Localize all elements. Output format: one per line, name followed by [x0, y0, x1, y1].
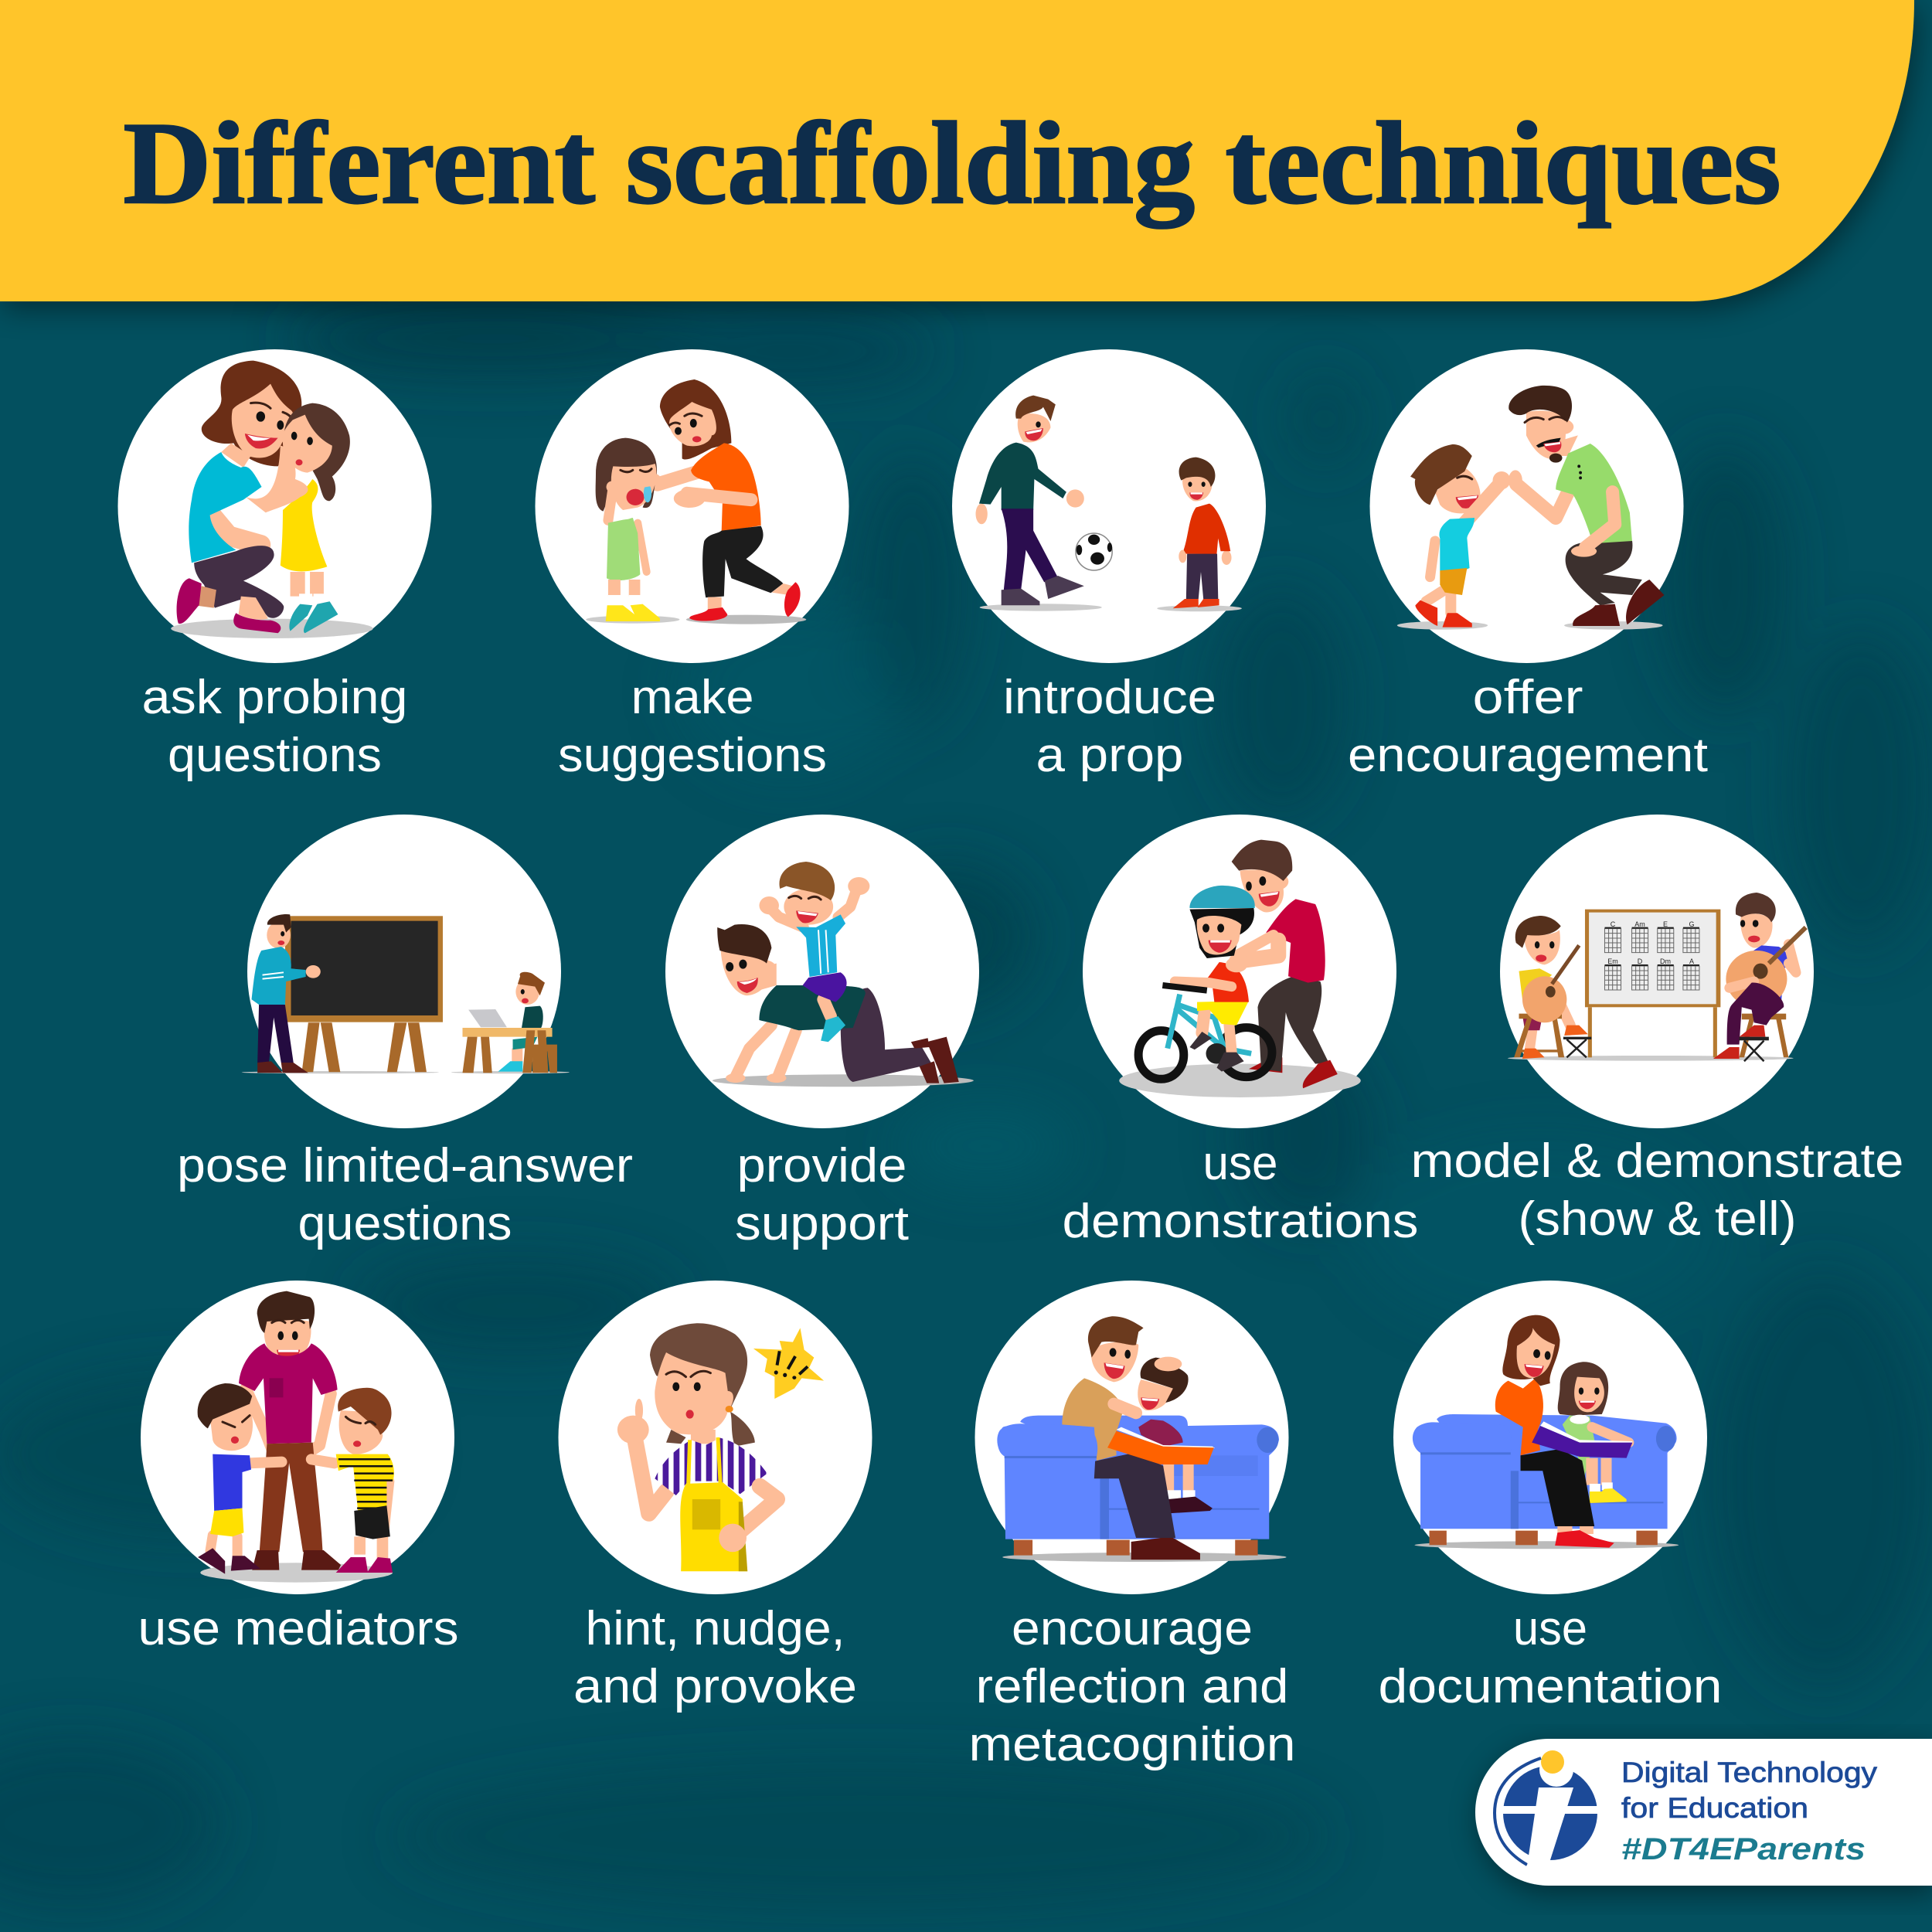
label: hint, nudge,	[586, 1602, 845, 1655]
brand text: Digital Technology	[1621, 1757, 1878, 1788]
label: suggestions	[558, 729, 827, 782]
panel: introduce a prop	[952, 349, 1266, 782]
illustration: father teaching boy to ride a bike	[1119, 840, 1361, 1097]
label: make	[631, 671, 754, 724]
label	[1411, 1134, 1904, 1246]
label: reflection and	[975, 1660, 1289, 1713]
label	[573, 1602, 857, 1713]
panel: provide support	[665, 815, 979, 1250]
panel: make suggestions	[535, 349, 849, 782]
label	[1003, 671, 1216, 782]
label: a prop	[1036, 729, 1184, 782]
panel: use demonstrations	[1062, 815, 1419, 1248]
chord chart names: Am	[1634, 920, 1645, 928]
label: support	[735, 1197, 909, 1250]
panel: pose limited-answer questions	[177, 815, 633, 1250]
header banner	[0, 0, 1914, 301]
icon: DT4E logo	[1495, 1750, 1601, 1866]
circle background	[1393, 1281, 1707, 1594]
chord chart names	[1607, 920, 1695, 965]
circle background	[117, 349, 431, 663]
illustration: teacher at blackboard and boy at laptop	[242, 914, 570, 1073]
chord chart names: Dm	[1660, 957, 1671, 965]
badge background	[1475, 1739, 1932, 1886]
label: use mediators	[138, 1602, 459, 1655]
label: model & demonstrate	[1411, 1134, 1904, 1188]
label	[558, 671, 827, 782]
panel: model and demonstrate	[1411, 815, 1904, 1246]
label: provide	[737, 1139, 907, 1192]
panel: encourage reflection and metacognition	[969, 1281, 1295, 1771]
circle background	[952, 349, 1266, 663]
label	[969, 1602, 1295, 1771]
chord chart names: D	[1638, 957, 1643, 965]
panel: ask probing questions	[117, 349, 431, 782]
label: demonstrations	[1062, 1195, 1419, 1248]
illustration: father mediating two boys	[198, 1291, 394, 1583]
label	[142, 671, 408, 782]
panel: offer encouragement	[1348, 349, 1708, 782]
label: introduce	[1003, 671, 1216, 724]
illustration: man kicking a ball to a boy	[976, 396, 1242, 611]
circle background	[1500, 815, 1814, 1128]
label: encourage	[1012, 1602, 1253, 1655]
circle background	[247, 815, 561, 1128]
label: questions	[298, 1197, 512, 1250]
circle background	[141, 1281, 454, 1594]
chord chart names: Em	[1607, 957, 1618, 965]
logo badge: Digital Technology for Education	[1475, 1739, 1932, 1886]
illustration: girl with raised finger and exclamation burst	[617, 1323, 824, 1571]
label: encouragement	[1348, 729, 1708, 782]
circle background	[558, 1281, 872, 1594]
label: use	[1513, 1602, 1587, 1655]
label	[735, 1139, 909, 1250]
label: (show & tell)	[1518, 1192, 1796, 1246]
illustration: father and boy high five	[1397, 386, 1665, 630]
label	[1379, 1602, 1722, 1713]
chord chart names: E	[1663, 920, 1668, 928]
illustration: guitar lesson with chord chart	[1508, 893, 1806, 1061]
chord chart names: C	[1611, 920, 1616, 928]
illustration: father and son reading on blue sofa	[997, 1316, 1287, 1562]
panel: hint, nudge and provoke	[558, 1281, 872, 1713]
title: Different scaffolding techniques	[124, 98, 1781, 229]
panel: use documentation	[1379, 1281, 1722, 1713]
chord chart names: A	[1689, 957, 1694, 965]
illustration: mother and daughter reading on blue sofa	[1413, 1315, 1679, 1549]
circle background	[665, 815, 979, 1128]
label	[177, 1139, 633, 1250]
illustration: boy riding on father's back	[713, 862, 974, 1087]
panel: use mediators	[138, 1281, 459, 1655]
label: offer	[1473, 671, 1583, 724]
brand text: for Education	[1621, 1792, 1808, 1824]
label: metacognition	[969, 1718, 1295, 1771]
label: pose limited-answer	[177, 1139, 633, 1192]
brand text: #DT4EParents	[1621, 1832, 1866, 1866]
label: questions	[168, 729, 382, 782]
label	[1062, 1137, 1419, 1248]
circle background	[1369, 349, 1683, 663]
label	[1348, 671, 1708, 782]
brand text	[1621, 1757, 1878, 1866]
circle background	[535, 349, 849, 663]
circle background	[975, 1281, 1289, 1594]
illustration: mother and daughter whispering	[171, 361, 373, 638]
chord chart names: G	[1689, 920, 1695, 928]
label: documentation	[1379, 1660, 1722, 1713]
label: ask probing	[142, 671, 408, 724]
illustration: mother comforting crying girl	[586, 379, 806, 624]
label: use	[1202, 1137, 1278, 1190]
circle background	[1083, 815, 1396, 1128]
label: and provoke	[573, 1660, 857, 1713]
